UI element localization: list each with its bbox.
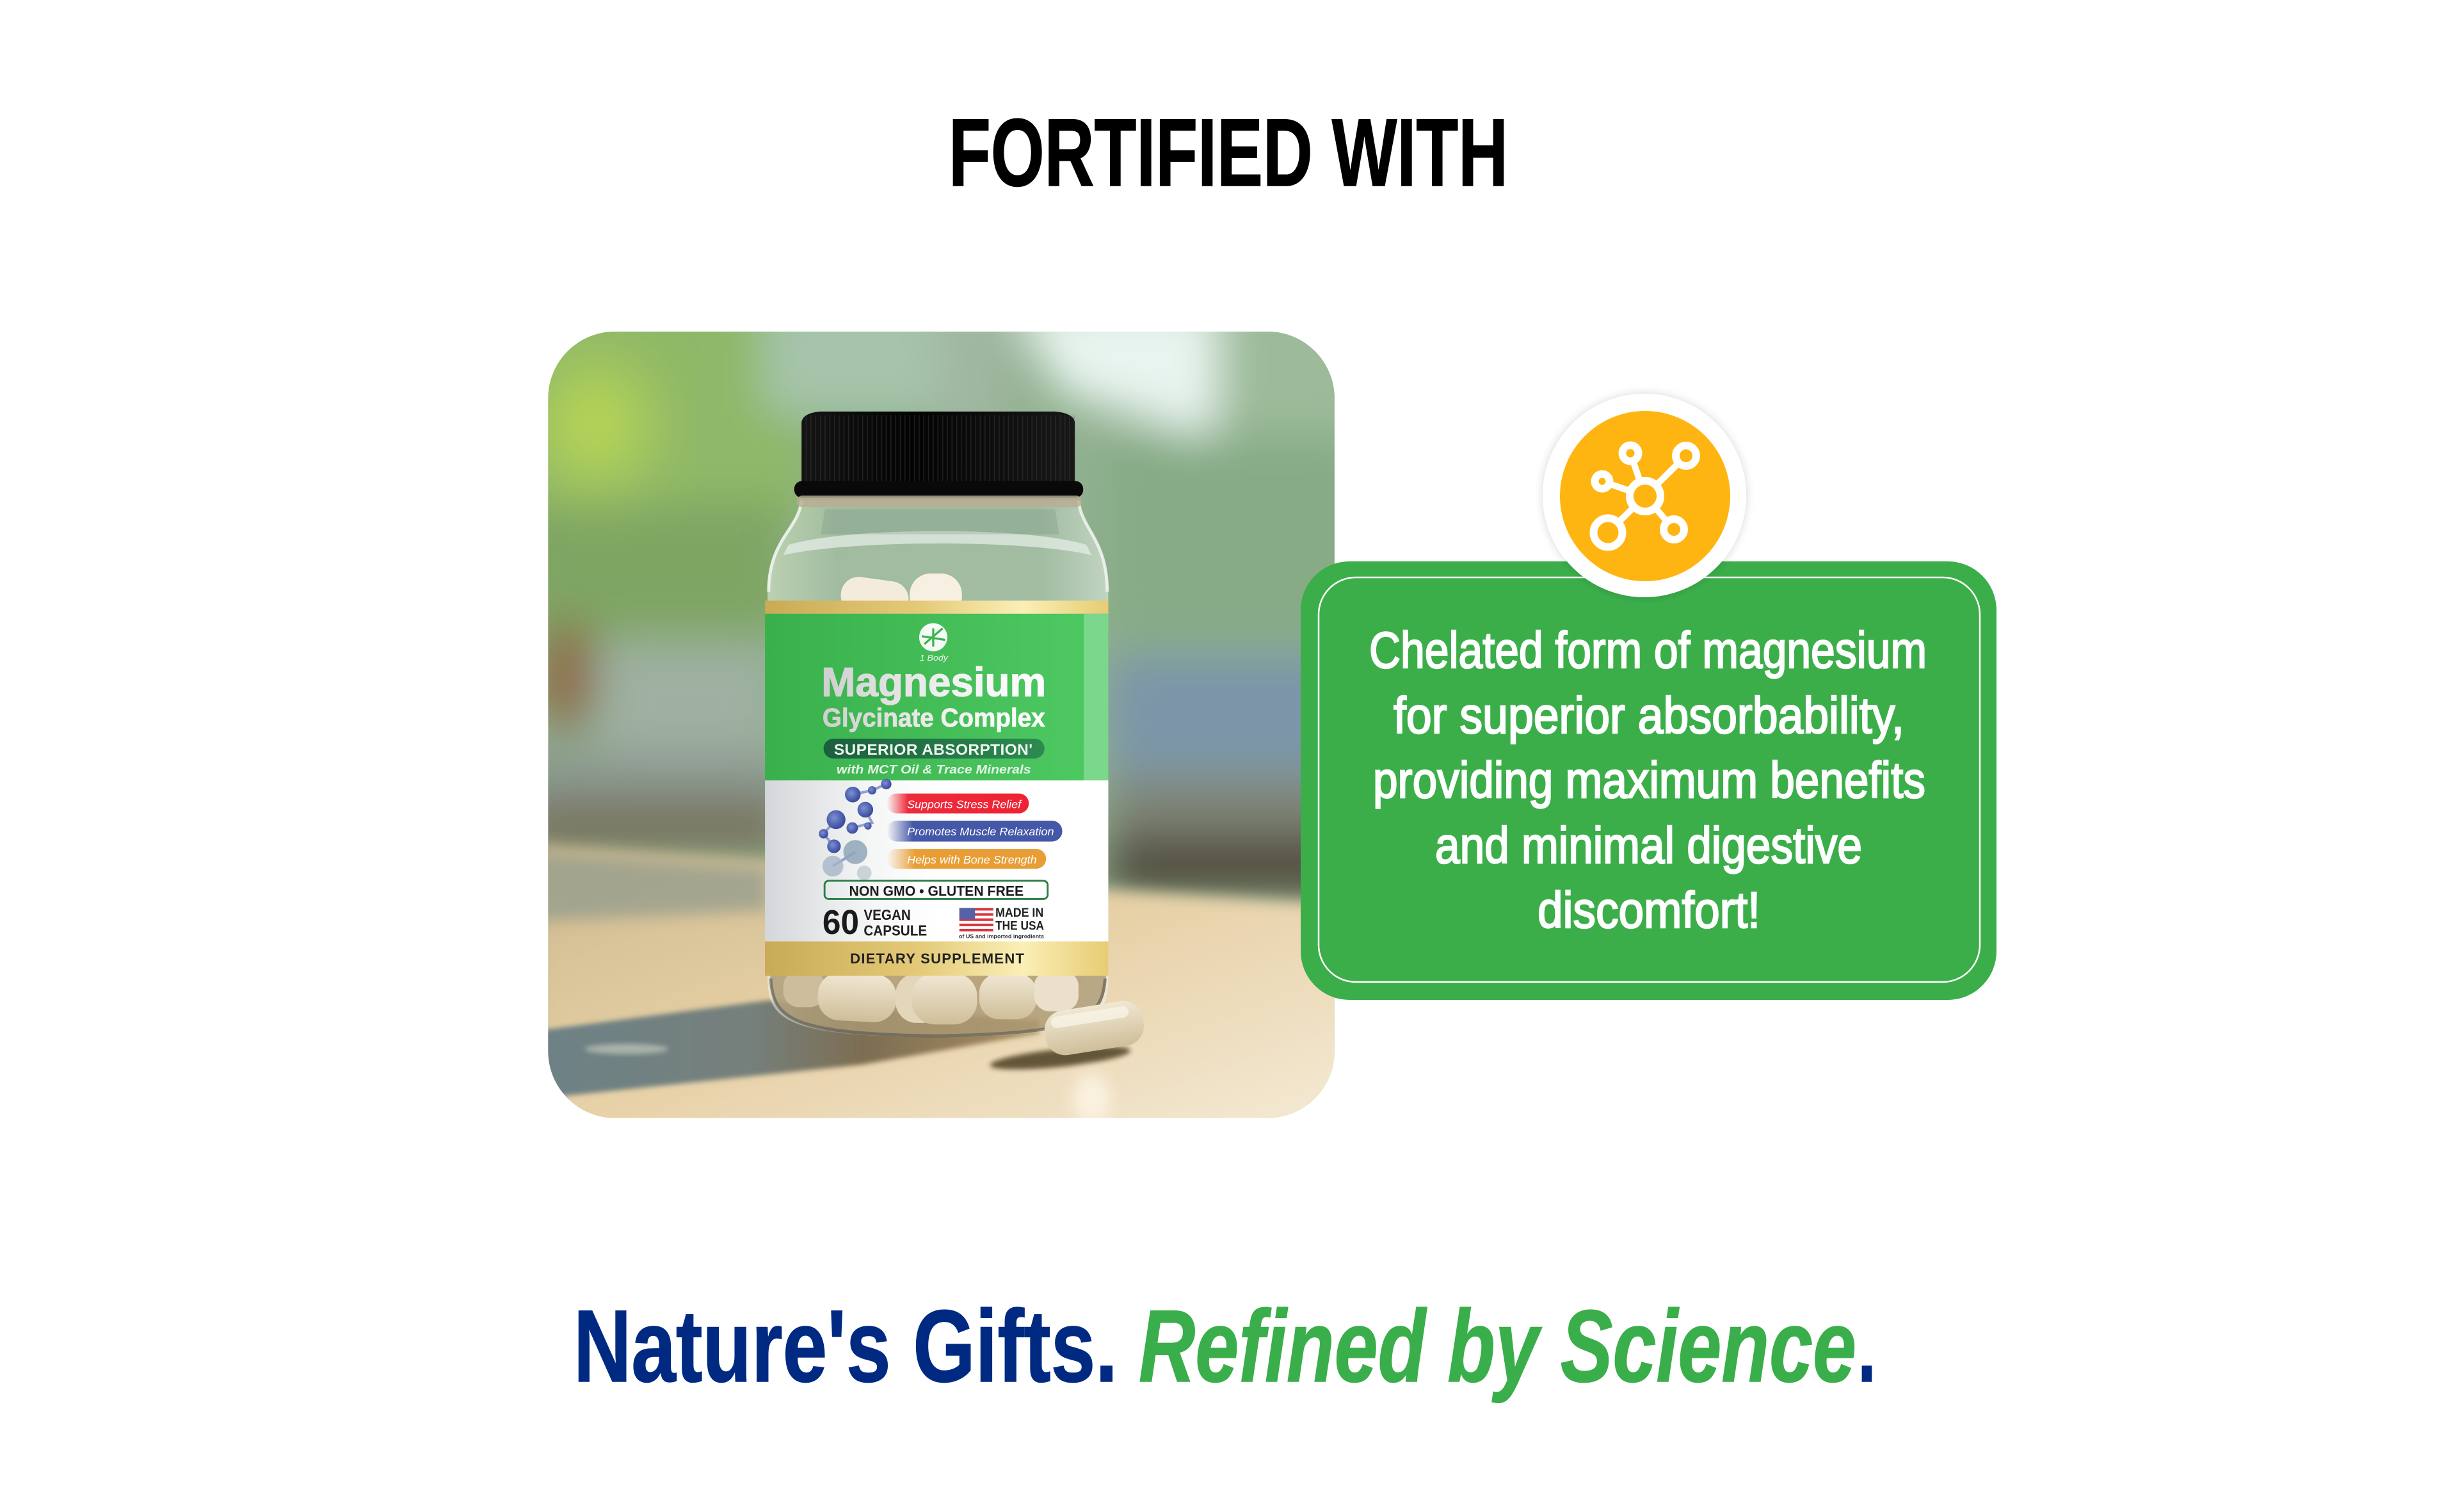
benefit pills: Helps with Bone Strength: [907, 853, 1037, 866]
tagline: Refined by Science: [1139, 1289, 1856, 1403]
capsules in jar: [783, 574, 1079, 1024]
title: FORTIFIED WITH: [949, 99, 1508, 206]
non gmo box: NON GMO • GLUTEN FREE: [849, 883, 1024, 899]
glass jar: [767, 501, 1108, 1037]
capsule count: [823, 910, 927, 936]
capsule count: VEGAN: [864, 906, 911, 923]
wooden table: [538, 845, 1353, 1135]
usa flag and origin: of US and imported ingredients: [959, 934, 1044, 940]
callout text: for superior absorbability,: [1394, 687, 1904, 744]
tagline: [574, 1289, 1876, 1403]
callout text: Chelated form of magnesium: [1369, 622, 1927, 679]
capsule count: 60: [823, 903, 859, 942]
usa flag and origin: MADE IN: [995, 906, 1043, 920]
superior absorption pill: SUPERIOR ABSORPTION': [834, 741, 1032, 759]
capsule count: CAPSULE: [864, 922, 927, 939]
molecule graphic: [819, 779, 892, 880]
callout text: discomfort!: [1538, 881, 1760, 938]
icon: molecule badge: [1543, 394, 1746, 597]
callout text: and minimal digestive: [1435, 817, 1862, 874]
callout text: providing maximum benefits: [1373, 752, 1925, 808]
label: Glycinate Complex: [823, 703, 1045, 732]
product photo panel: [548, 332, 1335, 1118]
label: [765, 600, 1108, 976]
usa flag and origin: THE USA: [995, 919, 1044, 933]
brand logo: 1 Body: [920, 653, 949, 663]
tagline: Nature's Gifts.: [574, 1289, 1118, 1403]
dietary supplement: DIETARY SUPPLEMENT: [850, 951, 1025, 967]
product name: Magnesium: [821, 660, 1046, 705]
benefit pills: Supports Stress Relief: [907, 798, 1022, 810]
loose capsule: [1041, 998, 1146, 1058]
label: with MCT Oil & Trace Minerals: [837, 763, 1031, 777]
tagline: .: [1858, 1289, 1876, 1403]
blurred window background: [548, 332, 1335, 1118]
usa flag and origin: [959, 906, 1044, 940]
callout text: [1369, 622, 1927, 938]
benefit pills: Promotes Muscle Relaxation: [907, 825, 1054, 838]
callout box: [1301, 561, 1996, 1000]
brand logo: [919, 623, 949, 663]
cap: [801, 412, 1075, 483]
benefit pills: [887, 794, 1063, 869]
bottle: [765, 412, 1108, 1037]
